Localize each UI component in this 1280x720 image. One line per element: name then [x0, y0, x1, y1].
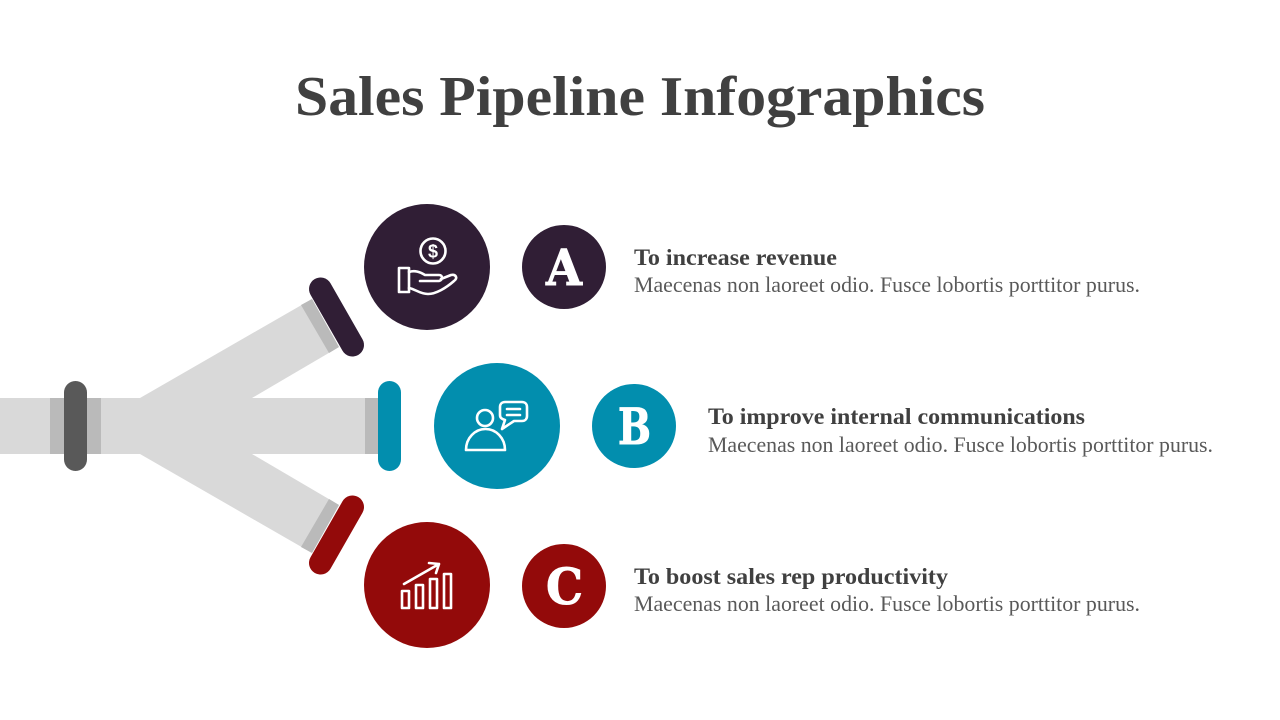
icon: hand with coin	[399, 238, 456, 294]
icon circle B	[434, 363, 560, 489]
pipeline graphic	[0, 289, 401, 563]
icon: person with speech bubble	[466, 402, 527, 450]
letter B: B	[618, 397, 651, 456]
heading A: To increase revenue	[634, 245, 837, 270]
body A: Maecenas non laoreet odio. Fusce lobortis porttitor purus.	[634, 272, 1140, 297]
body B: Maecenas non laoreet odio. Fusce lobortis porttitor purus.	[708, 432, 1213, 457]
icon: hand with coin: $	[428, 242, 438, 262]
icon: rising bar chart	[402, 563, 451, 608]
letter badge A	[522, 225, 606, 309]
letter C: C	[546, 557, 583, 616]
item A	[364, 204, 1140, 330]
pipe joint shading	[50, 299, 379, 553]
top outlet clamp	[320, 289, 352, 345]
letter A: A	[545, 238, 583, 297]
item C	[364, 522, 1140, 648]
title: Sales Pipeline Infographics	[295, 66, 985, 128]
item B	[434, 363, 1213, 489]
bottom outlet clamp	[320, 507, 352, 563]
letter badge B	[592, 384, 676, 468]
letter badge C	[522, 544, 606, 628]
pipe body	[0, 299, 378, 553]
middle outlet clamp	[378, 381, 401, 471]
heading C: To boost sales rep productivity	[634, 564, 949, 589]
icon circle A	[364, 204, 490, 330]
body C: Maecenas non laoreet odio. Fusce lobortis porttitor purus.	[634, 591, 1140, 616]
grey inlet clamp	[64, 381, 87, 471]
heading B: To improve internal communications	[708, 404, 1085, 429]
icon circle C	[364, 522, 490, 648]
